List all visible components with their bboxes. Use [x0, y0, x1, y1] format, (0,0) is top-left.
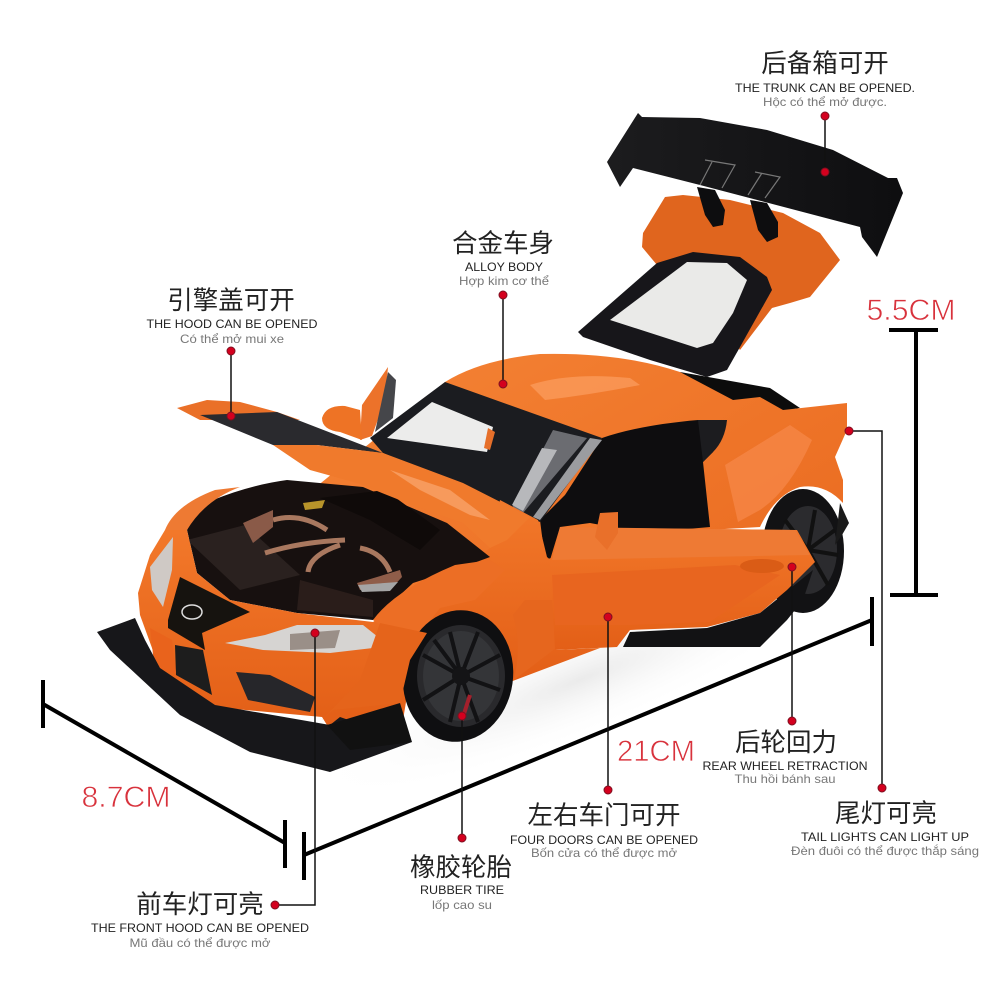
inner mirror orange [484, 428, 495, 450]
callout: hood: THE HOOD CAN BE OPENED [146, 317, 318, 331]
trunk window white [610, 262, 747, 348]
front wheel [394, 603, 522, 749]
callout: alloy body: 合金车身 [452, 230, 554, 258]
front splitter [97, 618, 412, 772]
dimension: width 8.7CM [43, 680, 285, 868]
nose grille [175, 645, 212, 695]
callout: doors [510, 613, 698, 860]
callout: front light: THE FRONT HOOD CAN BE OPENED [91, 921, 309, 935]
dimension: length 21CM: 21CM [617, 735, 695, 768]
dimension: height 5.5CM [866, 294, 956, 595]
callout: tail lights: Đèn đuôi có thể được thắp sáng [791, 843, 979, 858]
door handle [740, 559, 784, 573]
rear wheel [762, 489, 844, 613]
callout: rubber tire [410, 712, 512, 912]
trunk window frame [578, 252, 772, 377]
right air box [357, 570, 402, 590]
open trunk lid [578, 195, 840, 377]
callout: hood [146, 287, 318, 420]
callout: rear wheel: Thu hồi bánh sau [734, 772, 836, 786]
rear deck opening [680, 372, 800, 415]
open hood [177, 400, 530, 548]
windshield frame [370, 382, 602, 522]
callout: trunk: Hộc có thể mở được. [763, 95, 887, 109]
a-pillar silver [533, 438, 602, 520]
front body orange [138, 530, 430, 725]
left headlight [150, 537, 173, 607]
callout: rear wheel [702, 563, 868, 786]
ground shadow [291, 520, 869, 840]
callout: trunk [735, 50, 915, 176]
car model [97, 113, 903, 840]
callout: tail lights [791, 427, 979, 858]
left mirror [322, 406, 362, 440]
badge [182, 605, 202, 619]
fender behind hood [400, 500, 600, 682]
right headlight [225, 625, 378, 653]
callout: rubber tire: lốp cao su [432, 898, 492, 912]
dimension: length 21CM [304, 597, 872, 880]
spoiler supports [697, 187, 725, 227]
side window grey [512, 430, 587, 513]
callout: doors: Bốn cửa có thể được mở [531, 846, 677, 860]
dimension: width 8.7CM: 8.7CM [82, 781, 170, 814]
callout: doors: 左右车门可开 [527, 802, 681, 830]
callout: rear wheel: 后轮回力 [735, 729, 837, 757]
callout: hood: 引擎盖可开 [167, 287, 295, 315]
car body main [300, 354, 847, 682]
callout: rear wheel: REAR WHEEL RETRACTION [702, 759, 868, 773]
callout: front light: 前车灯可亮 [136, 891, 264, 919]
lower bumper intake [236, 672, 315, 712]
callout: front light: Mũ đầu có thể được mở [130, 936, 271, 950]
callout: alloy body: ALLOY BODY [465, 260, 543, 274]
door mirror [595, 512, 618, 550]
callout: tail lights: TAIL LIGHTS CAN LIGHT UP [801, 830, 969, 844]
callout: trunk: 后备箱可开 [761, 50, 889, 78]
callout: alloy body [452, 230, 554, 388]
center pillar [150, 628, 176, 673]
oil cap [303, 500, 325, 510]
nose black panel [168, 577, 250, 650]
dimension: height 5.5CM: 5.5CM [866, 294, 956, 327]
side skirt [623, 570, 813, 647]
engine top cover [320, 490, 440, 550]
door opening [540, 420, 727, 560]
far side door [360, 367, 388, 440]
rear quarter panel glass [698, 420, 727, 462]
windshield light area [387, 402, 493, 452]
roof highlights [530, 376, 640, 400]
callout: front light [91, 629, 319, 950]
engine bay [187, 480, 490, 620]
callout: rubber tire: 橡胶轮胎 [410, 854, 512, 882]
front fender flare [322, 623, 427, 720]
fender top [165, 487, 240, 530]
rear spoiler [607, 113, 903, 257]
callout: rubber tire: RUBBER TIRE [420, 883, 504, 897]
callout: trunk: THE TRUNK CAN BE OPENED. [735, 81, 915, 95]
callout: tail lights: 尾灯可亮 [835, 800, 937, 828]
window light band [512, 448, 557, 511]
intake pipes [265, 518, 390, 572]
callout: doors: FOUR DOORS CAN BE OPENED [510, 833, 698, 847]
rear bumper black [835, 503, 849, 545]
callout: alloy body: Hợp kim cơ thể [459, 274, 549, 288]
open door [550, 512, 815, 650]
callout: hood: Có thể mở mui xe [180, 332, 284, 346]
left air box [243, 510, 273, 543]
